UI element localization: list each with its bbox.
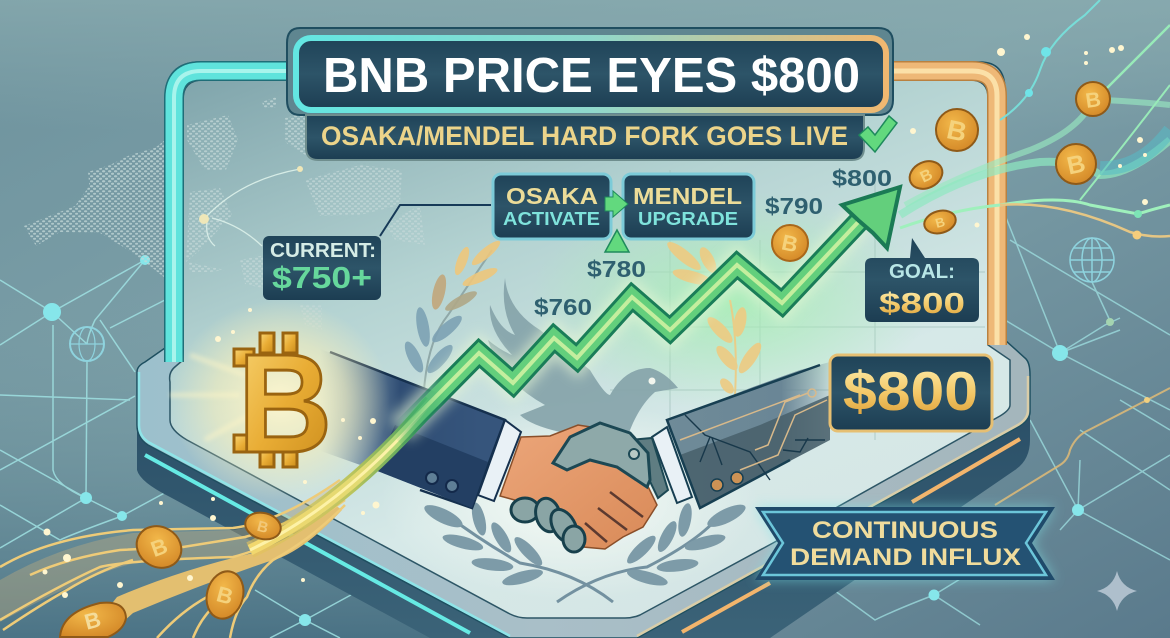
arrow: up marker	[605, 230, 629, 252]
goal box: $800	[879, 288, 965, 320]
current price box	[263, 236, 381, 300]
coin: right 2: B	[918, 166, 935, 187]
price labels: $800	[832, 165, 892, 191]
coin: lower-left 3	[201, 567, 249, 623]
laurel left	[401, 238, 503, 390]
white glow lower panel	[380, 400, 760, 600]
coin: bottom: B	[82, 606, 104, 635]
connector line	[380, 205, 491, 236]
coin: lower-left 3: B	[214, 581, 236, 610]
Mendel box: UPGRADE	[638, 209, 738, 229]
orange frame right	[885, 71, 997, 345]
current price box: CURRENT:	[270, 240, 376, 262]
subtitle box	[306, 115, 864, 160]
banner: CONTINUOUS	[812, 517, 998, 544]
finger lines	[585, 492, 643, 542]
arrow head	[842, 187, 900, 248]
coin: far right 1: B	[1084, 88, 1102, 113]
panel grid	[610, 170, 985, 460]
coin: bottom	[60, 603, 126, 637]
network lines right	[820, 215, 1170, 625]
subtitle text: OSAKA/MENDEL HARD FORK GOES LIVE	[321, 121, 848, 151]
coin: lower-left 1: B	[147, 533, 171, 562]
icon: big bitcoin symbol: B	[238, 324, 332, 482]
dove eye	[648, 378, 656, 384]
price labels: $760	[534, 294, 592, 320]
flow nodes	[1025, 47, 1142, 240]
icon: globe left	[70, 327, 104, 361]
dove silhouette	[488, 278, 678, 460]
title text: BNB PRICE EYES $800	[323, 49, 860, 103]
big price box: $800	[843, 360, 978, 422]
Osaka box: OSAKA	[506, 183, 598, 209]
handshake	[310, 345, 830, 552]
right sleeve cracks	[685, 415, 825, 480]
robot joint	[629, 449, 639, 459]
coin: right 3: B	[934, 214, 947, 231]
orange stripe bottom	[682, 583, 770, 632]
green glow	[530, 190, 930, 410]
Mendel box	[623, 174, 754, 239]
goal box	[865, 238, 979, 322]
big price box	[830, 355, 992, 431]
world map dots outside	[24, 140, 165, 278]
left cuff	[478, 420, 521, 501]
glow rays	[170, 355, 250, 440]
gold dotted band	[0, 482, 345, 622]
banner glow	[755, 507, 1055, 580]
laurel right	[664, 238, 765, 396]
coin: chart: B	[780, 230, 800, 257]
coin: chart	[772, 225, 808, 261]
robot hand top	[553, 423, 650, 487]
right sleeve circuit	[680, 389, 827, 470]
left sleeve lower band	[375, 425, 488, 508]
right sleeve buttons	[711, 472, 743, 491]
robot fingers	[511, 495, 585, 552]
goal box: GOAL:	[889, 261, 955, 283]
arrow halo	[400, 218, 862, 430]
Osaka box	[493, 174, 611, 239]
map nodes	[199, 166, 303, 224]
banner	[755, 507, 1055, 580]
main panel: dark under-body	[137, 415, 1030, 638]
Mendel box: MENDEL	[633, 183, 742, 209]
arrow: Osaka to Mendel	[605, 191, 628, 217]
price labels: $790	[765, 193, 823, 219]
orange stripe right	[912, 439, 1020, 502]
gold flow lines	[0, 480, 345, 638]
network nodes	[43, 255, 1150, 626]
title box	[287, 28, 893, 115]
coin: right 3	[922, 207, 958, 237]
teal stripe bottom-left	[145, 455, 470, 633]
main panel: bevel	[137, 62, 1030, 638]
right sleeve	[667, 362, 830, 508]
green flow right	[900, 0, 1170, 236]
arrow tail	[250, 402, 432, 550]
current price box: $750+	[272, 260, 372, 295]
icon: check mark	[859, 116, 897, 152]
coin: right 1: B	[944, 114, 969, 148]
price labels	[534, 165, 892, 320]
banner: DEMAND INFLUX	[790, 544, 1021, 571]
world map dots inside	[186, 97, 425, 330]
coin: far right 2	[1056, 144, 1096, 184]
Osaka box: ACTIVATE	[503, 209, 600, 229]
map connection lines	[205, 169, 300, 246]
teal frame left	[174, 71, 295, 362]
big bitcoin glow	[170, 300, 390, 500]
gold ribbon lower-left	[85, 505, 342, 638]
right sleeve outline	[667, 365, 820, 508]
coin: right 2	[905, 156, 947, 194]
robot wrist	[630, 438, 668, 498]
coin: right 1	[936, 109, 978, 151]
sleeve buttons	[426, 472, 458, 492]
right sleeve lower band	[680, 395, 830, 508]
price labels: $780	[587, 256, 646, 282]
coin: far right 1	[1076, 82, 1110, 116]
coin: lower-left 2	[242, 509, 284, 543]
title outer plate	[287, 28, 893, 115]
gold trace right	[995, 388, 1170, 505]
price arrow	[395, 187, 900, 438]
coin: lower-left 2: B	[255, 518, 270, 537]
title glowing border	[296, 38, 886, 110]
hand	[500, 425, 657, 549]
wreath	[422, 500, 748, 602]
network lines left	[0, 260, 360, 638]
main panel: inner glass	[170, 80, 1010, 618]
coin: lower-left 1	[129, 518, 189, 576]
left sleeve	[310, 345, 505, 508]
icon: sparkle	[1097, 571, 1137, 611]
icon: globe right	[1070, 238, 1114, 282]
left sleeve top edge	[330, 352, 505, 508]
right cuff	[652, 427, 692, 503]
panel edge highlights	[139, 372, 1028, 636]
coin: far right 2: B	[1064, 149, 1088, 181]
